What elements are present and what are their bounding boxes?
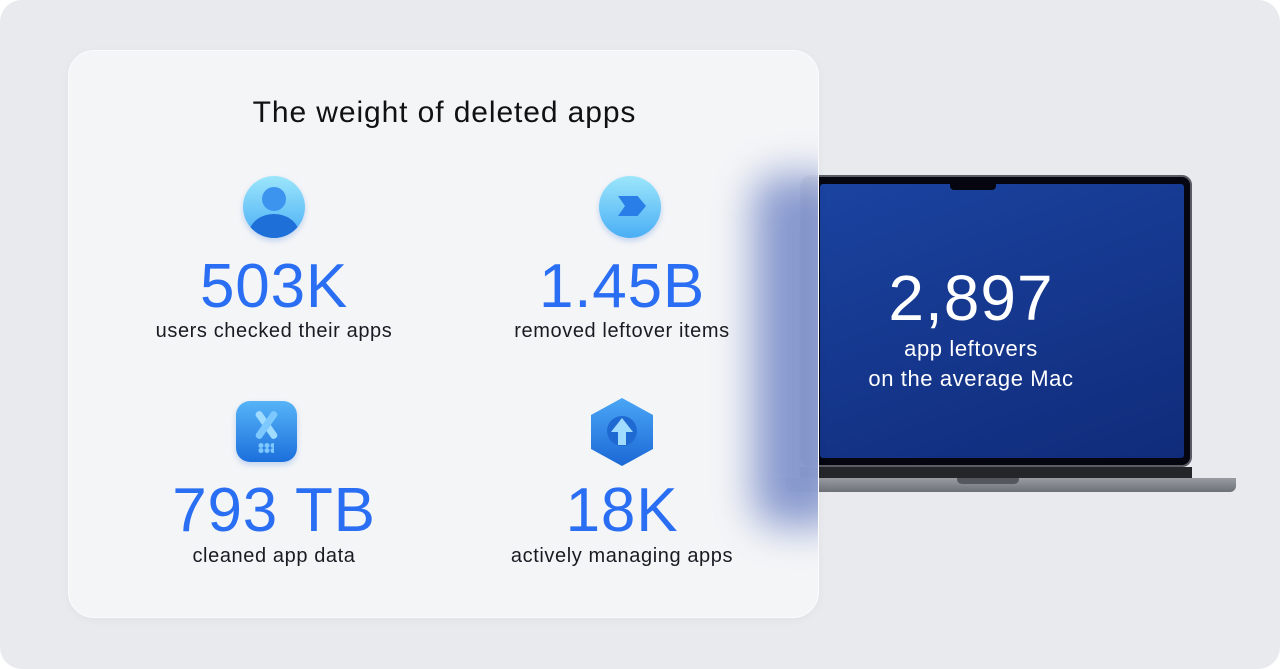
stat 793 TB: 793 TB <box>172 476 376 545</box>
icon: user <box>243 176 305 238</box>
title: The weight of deleted apps <box>253 96 636 129</box>
panel: stats card: cleaned app data <box>192 545 356 567</box>
laptop screen <box>820 184 1184 458</box>
panel: stats card: actively managing apps <box>511 545 733 567</box>
stat 1.45B: 1.45B <box>539 252 705 321</box>
screen text <box>868 262 1074 391</box>
stat 18K: 18K <box>566 476 678 545</box>
blur shadow <box>754 176 844 526</box>
stat 503K: 503K <box>200 252 348 321</box>
icon: puzzle <box>599 176 661 238</box>
screen text: on the average Mac <box>868 366 1074 391</box>
icon: cleanup <box>236 401 297 462</box>
screen text: app leftovers <box>904 336 1038 361</box>
icon: upgrade <box>591 398 653 466</box>
laptop lid <box>800 175 1192 467</box>
panel: stats card: users checked their apps <box>156 320 392 342</box>
screen text: 2,897 <box>888 262 1054 334</box>
panel: stats card <box>68 50 819 618</box>
laptop base <box>800 467 1192 479</box>
panel: stats card: removed leftover items <box>514 320 730 342</box>
laptop <box>802 175 1236 492</box>
